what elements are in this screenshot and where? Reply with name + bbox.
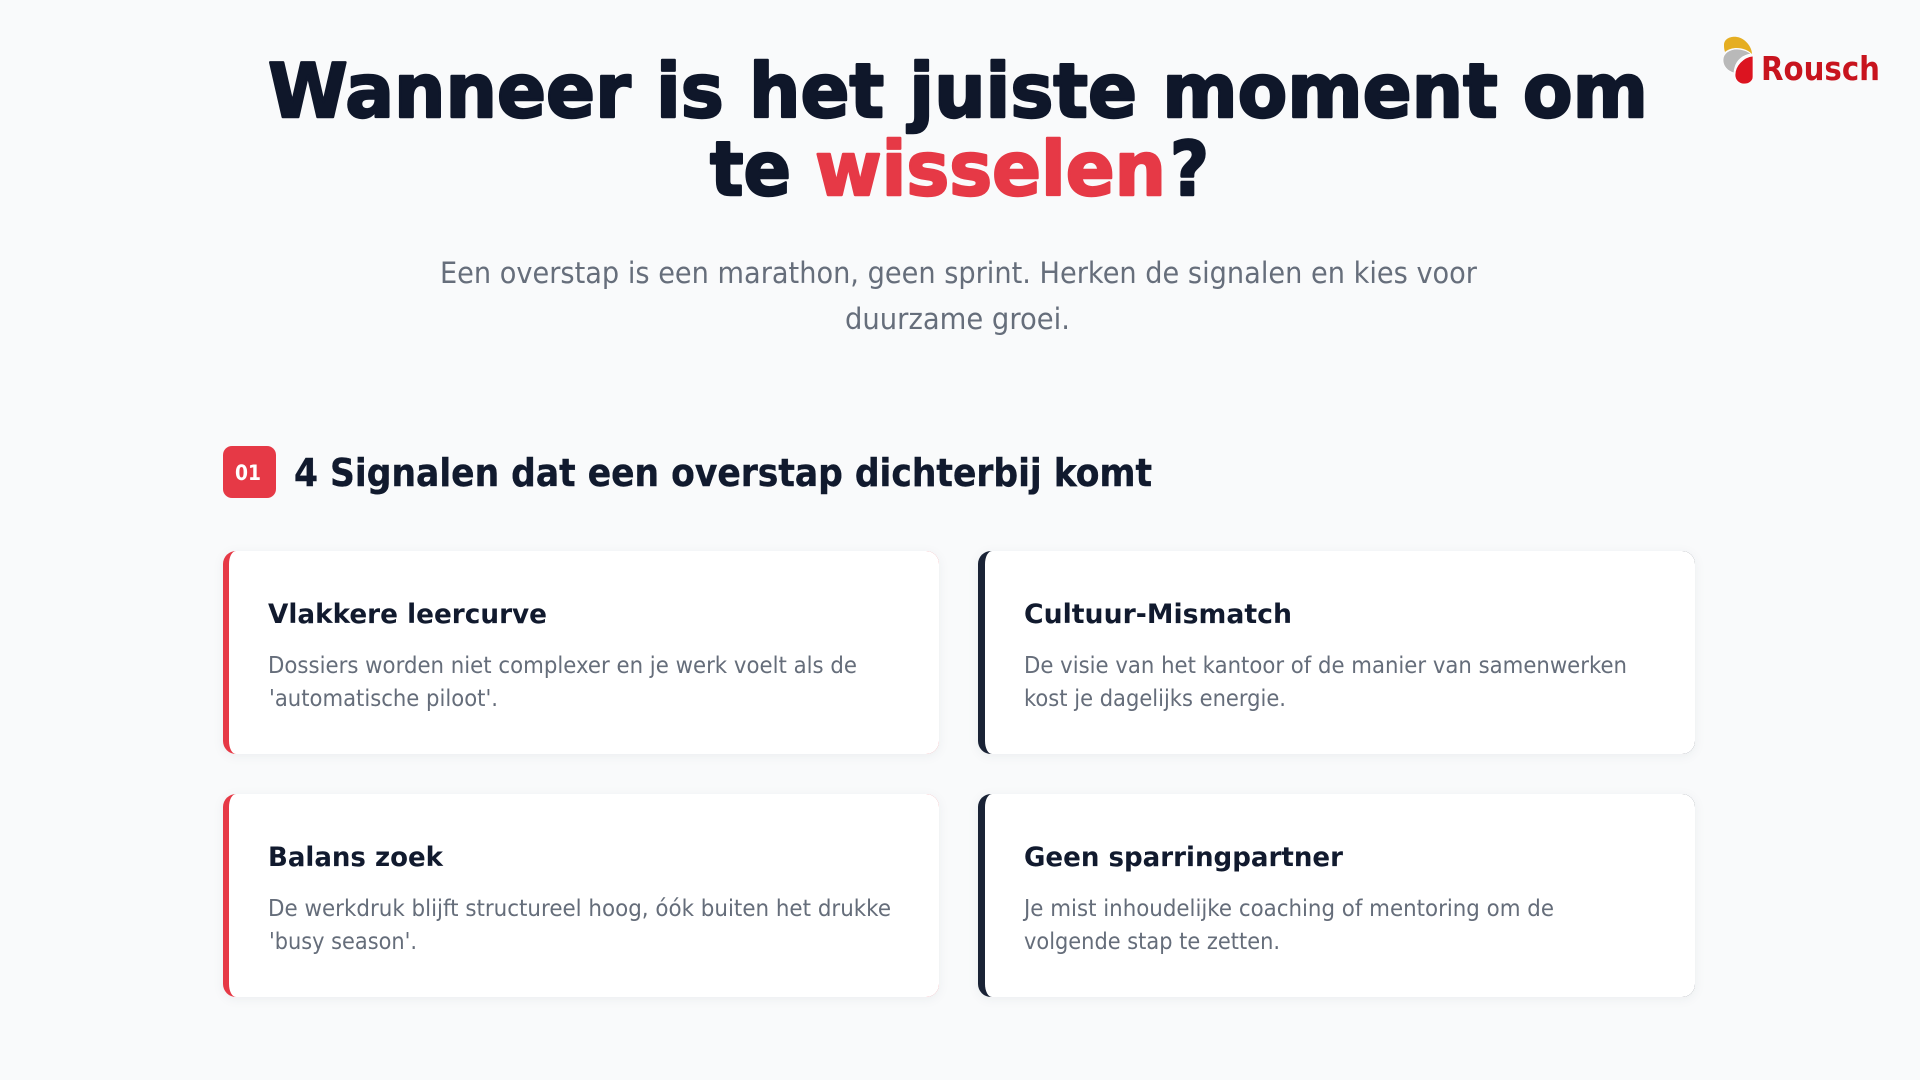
- title: ?: [1170, 125, 1209, 213]
- panel: Vlakkere leercurve: 'automatische piloot'.: [269, 686, 498, 712]
- subtitle: [440, 256, 1477, 336]
- section heading: [223, 446, 1152, 498]
- subtitle: Een overstap is een marathon, geen sprint. Herken de signalen en kies voor: [440, 256, 1477, 290]
- panel: Vlakkere leercurve: Dossiers worden niet complexer en je werk voelt als de: [268, 653, 857, 679]
- title: [268, 47, 1648, 213]
- panel: Geen sparringpartner: volgende stap te zetten.: [1024, 929, 1280, 955]
- panel: Balans zoek: [223, 794, 939, 997]
- panel: Cultuur-Mismatch: [978, 551, 1695, 754]
- panel: Geen sparringpartner: [978, 794, 1695, 997]
- section title: 4 Signalen dat een overstap dichterbij komt: [294, 451, 1152, 495]
- panel: Vlakkere leercurve: [223, 551, 939, 754]
- panel: Cultuur-Mismatch: kost je dagelijks energie.: [1024, 686, 1286, 712]
- panel: Geen sparringpartner: Je mist inhoudelijke coaching of mentoring om de: [1022, 896, 1554, 922]
- subtitle: duurzame groei.: [845, 302, 1070, 336]
- title: Wanneer is het juiste moment om: [268, 47, 1648, 135]
- logo: Rousch: [1723, 37, 1880, 88]
- logo wordmark: Rousch: [1761, 49, 1880, 88]
- panel: Vlakkere leercurve: Vlakkere leercurve: [268, 599, 547, 630]
- panel: Balans zoek: 'busy season'.: [269, 929, 417, 955]
- number badge: 01: [235, 461, 261, 485]
- panel: Balans zoek: Balans zoek: [268, 842, 444, 873]
- panel: Cultuur-Mismatch: Cultuur-Mismatch: [1024, 599, 1292, 630]
- title: te: [710, 125, 791, 213]
- panel: Cultuur-Mismatch: De visie van het kantoor of de manier van samenwerken: [1024, 653, 1627, 679]
- number badge: [223, 446, 276, 498]
- title: wisselen: [815, 125, 1166, 213]
- panel: Geen sparringpartner: Geen sparringpartner: [1024, 842, 1344, 873]
- icon: logo petals: [1723, 37, 1753, 84]
- panel: Balans zoek: De werkdruk blijft structureel hoog, óók buiten het drukke: [268, 896, 891, 922]
